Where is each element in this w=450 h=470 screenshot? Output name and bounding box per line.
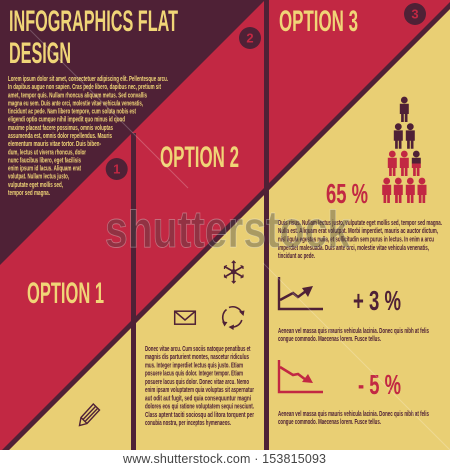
text block: intro: enim ipsum id lacus. Aliquam erat <box>8 164 81 173</box>
text block: option 2: dolores eos qui ratione voluptatem sequi nesciunt. <box>145 402 254 411</box>
text block: chart 2 caption <box>278 409 429 426</box>
text block: intro: magna eu sem. Duis ante orci, molestie vitae vehicula venenatis, <box>8 98 143 107</box>
vertical bar 2 <box>264 0 269 450</box>
text block: option 2 <box>145 344 254 427</box>
text block: option 2: conubia nostra, per inceptos hymenaeos. <box>145 418 231 427</box>
text block: intro: nunc faucibus libero, eget facilisis <box>8 155 81 164</box>
icon: envelope <box>175 311 195 324</box>
badge 3: 3 <box>411 6 419 22</box>
text block: intro: tempor sed magna. <box>8 188 50 197</box>
icon: refresh arrows <box>222 307 244 330</box>
text block: intro: Lorem ipsum dolor sit amet, consectetuer adipiscing elit. Pellentesque arcu. <box>8 74 168 83</box>
text block: intro: volutpat. Nullam lectus justo, <box>8 172 69 181</box>
icon: pencil <box>80 404 100 426</box>
stat: plus 3 percent: + 3 % <box>353 285 401 316</box>
text block: option 2: Class aptent taciti sociosqu ad litora torquent per <box>145 410 254 419</box>
text block: intro: tincidunt ac pede. Nam libero tempore, cum soluta nobis est <box>8 107 136 116</box>
stat: minus 5 percent: - 5 % <box>358 369 401 400</box>
icon: people pyramid <box>382 97 426 203</box>
text block: intro: dum, lectus ut viverra rhoncus, dolor <box>8 147 86 156</box>
panel: dark top-left triangle <box>0 0 265 265</box>
text block: option 3: tincidunt ac pede. <box>278 251 315 260</box>
badge 2: 2 <box>246 30 254 46</box>
text block: option 2: aut odit aut fugit, sed quia consequuntur magni <box>145 393 251 402</box>
title: DESIGN <box>9 37 71 70</box>
text block: option 2: enim ipsam voluptatem quia voluptas sit aspernatur <box>145 385 254 394</box>
text block: intro: eligendi optio cumque nihil impedit quo minus id quod <box>8 115 125 124</box>
text block: intro: amet, tempor quis. Nullam rhoncus aliquam metus. Sed convallis <box>8 90 147 99</box>
text block: chart 1 caption: congue commodo. Maecenas lorem. Fusce tellus. <box>278 334 381 343</box>
text block: intro: assumenda est, omnis dolor repellendus. Mauris <box>8 131 112 140</box>
watermark: shutterstock <box>105 201 350 259</box>
text block: option 2: posuere lacus quis dolor. Integer tempor. Etiam <box>145 369 243 378</box>
badge 3 <box>404 3 426 25</box>
stat: 65 percent: 65 % <box>326 178 368 209</box>
text block: intro: In dapibus augue non sapien. Cras pede libero, dapibus nec, pretium sit <box>8 82 161 91</box>
text block: intro: maxime placeat facere possimus, omnis voluptas <box>8 123 113 132</box>
badge 1 <box>106 158 128 180</box>
text block: option 2: magnis dis parturient montes, nascetur ridiculus <box>145 352 249 361</box>
title: INFOGRAPHICS FLAT <box>9 5 178 38</box>
chart: rising line <box>279 277 323 309</box>
text block: chart 2 caption: congue commodo. Maecenas lorem. Fusce tellus. <box>278 417 381 426</box>
badge 2 <box>239 27 261 49</box>
heading: option 3: OPTION 3 <box>279 5 358 38</box>
title <box>9 5 178 70</box>
text block: intro <box>8 74 168 197</box>
text block: option 2: Donec vitae arcu. Cum sociis natoque penatibus et <box>145 344 251 353</box>
text block: chart 1 caption <box>278 326 429 343</box>
text block: intro: vulputate eget mollis sed, <box>8 180 63 189</box>
text block: option 3 <box>278 218 442 260</box>
footer credit: www.shutterstock.com · 153815093 <box>122 452 326 466</box>
vertical bar 1 <box>131 133 136 450</box>
chart: falling line <box>279 360 323 392</box>
text block: intro: elementum mauris vitae tortor. Duis biben- <box>8 139 101 148</box>
badge 1: 1 <box>113 162 120 176</box>
heading: option 1: OPTION 1 <box>27 277 104 310</box>
heading: option 2: OPTION 2 <box>160 141 239 174</box>
text block: option 2: mus. Integer imperdiet lectus quis justo. Etiam <box>145 360 243 369</box>
icon: snowflake <box>224 261 243 283</box>
text block: option 2: posuere lacus quis dolor. Donec vitae arcu. Nemo <box>145 377 249 386</box>
